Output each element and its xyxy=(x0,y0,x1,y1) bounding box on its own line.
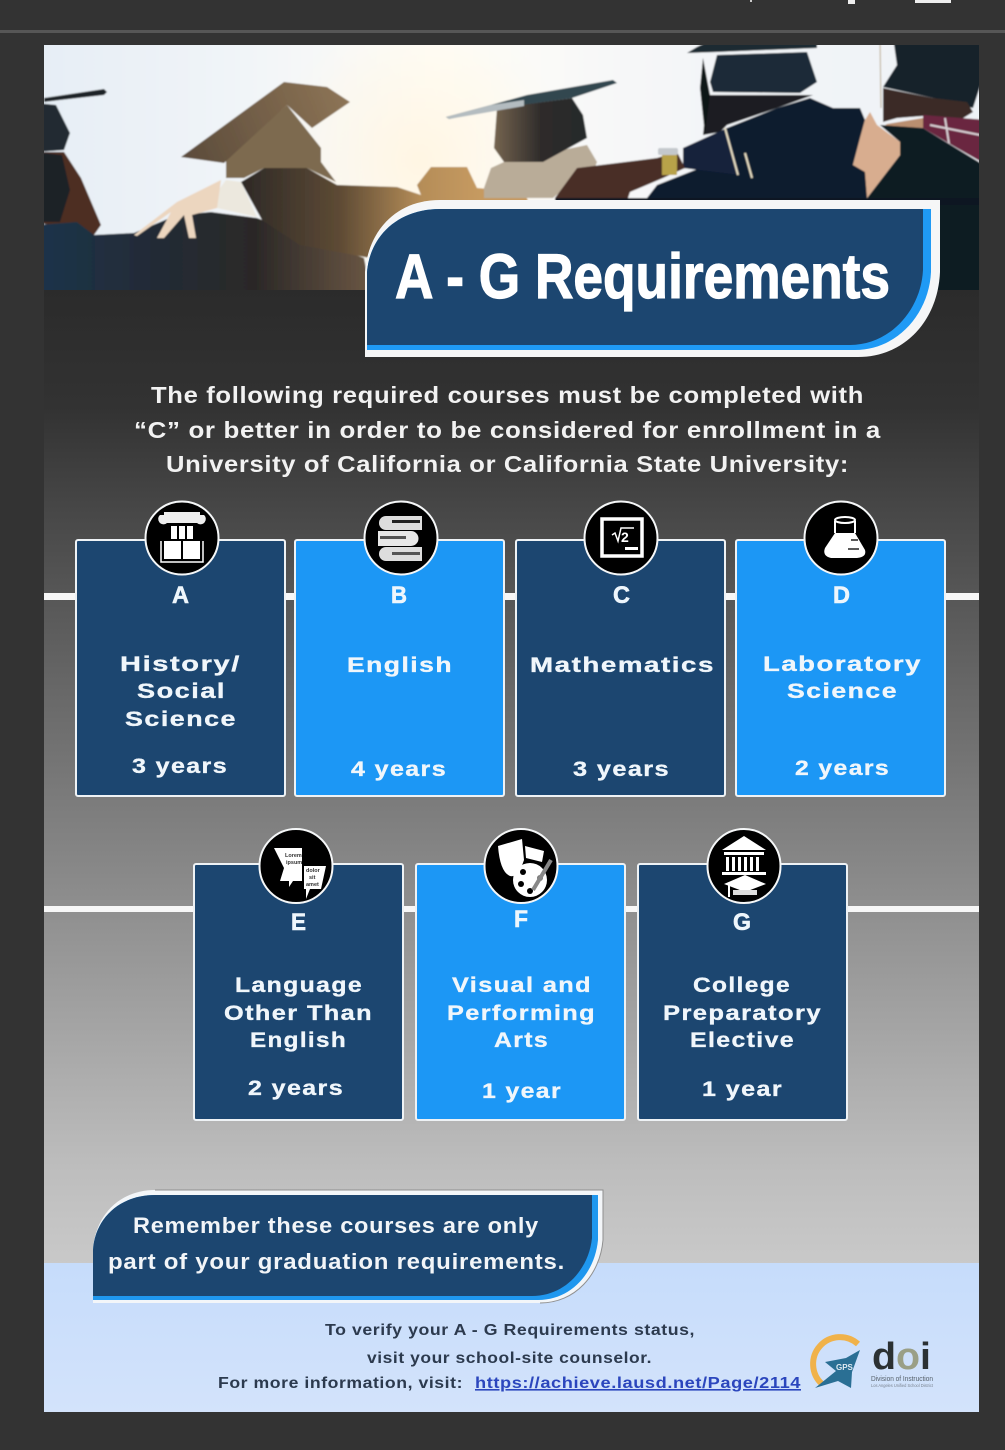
footer text: For more information, visit: xyxy=(218,1375,463,1392)
title banner xyxy=(365,200,940,357)
icon: laboratory flask xyxy=(804,502,878,574)
icon: chalkboard with square root xyxy=(584,502,658,574)
logo: GPS: GPS xyxy=(836,1363,854,1372)
icon: speech bubbles: sit xyxy=(309,875,316,881)
card F: Visual and xyxy=(452,973,592,997)
logo: doi: Division of Instruction xyxy=(871,1376,933,1383)
card A: Social xyxy=(137,679,226,703)
logo: GPS xyxy=(813,1337,860,1388)
card F: Arts xyxy=(494,1028,549,1052)
title: A - G Requirements xyxy=(395,242,890,312)
card C: 3 years xyxy=(573,757,670,781)
card E: Other Than xyxy=(224,1001,373,1025)
card D: 2 years xyxy=(795,756,890,780)
icon: chalkboard with square root: 2 xyxy=(621,529,629,545)
third graduate xyxy=(446,80,617,198)
card G: 1 year xyxy=(702,1077,783,1101)
icon: speech bubbles: dolor xyxy=(306,868,321,874)
fifth graduate xyxy=(852,45,979,290)
logo: doi: Los Angeles Unified School District xyxy=(871,1383,934,1388)
card E: 2 years xyxy=(248,1076,344,1100)
intro text: “C” or better in order to be considered for enrollment in a xyxy=(134,417,881,443)
card E: Language xyxy=(235,973,363,997)
footer text: visit your school-site counselor. xyxy=(367,1350,652,1367)
card E: English xyxy=(250,1028,347,1052)
photo: graduates seen from behind xyxy=(36,37,987,298)
card B: B xyxy=(391,582,407,609)
logo: doi: doi xyxy=(872,1336,931,1378)
card B xyxy=(295,502,504,796)
card D: Laboratory xyxy=(763,652,922,676)
card B: English xyxy=(347,653,453,677)
footer text: https://achieve.lausd.net/Page/2114 xyxy=(475,1375,801,1392)
card F: Performing xyxy=(447,1001,596,1025)
icon: speech bubbles xyxy=(260,829,332,903)
icon: speech bubbles: Lorem xyxy=(285,853,302,859)
callout xyxy=(93,1190,603,1303)
card C: C xyxy=(613,582,630,609)
card G: G xyxy=(733,909,751,936)
icon: speech bubbles: ipsum xyxy=(286,860,302,866)
callout: part of your graduation requirements. xyxy=(108,1249,565,1274)
card A: Science xyxy=(125,707,237,731)
icon: stack of books xyxy=(364,502,438,574)
connector bar row 2 xyxy=(44,906,979,912)
intro text: The following required courses must be completed with xyxy=(151,382,864,408)
card G xyxy=(638,829,847,1120)
card E xyxy=(194,829,403,1120)
icon: speech bubbles: amet xyxy=(306,882,319,888)
icon: column and open book xyxy=(146,502,218,574)
connector bar row 1 xyxy=(44,593,979,600)
card C: Mathematics xyxy=(530,653,715,677)
card E: E xyxy=(291,909,306,936)
footer text: To verify your A - G Requirements status, xyxy=(325,1322,695,1339)
card G: College xyxy=(693,973,791,997)
card A: A xyxy=(172,582,189,609)
icon: university building and cap xyxy=(708,829,780,903)
card A xyxy=(76,502,285,796)
card D: D xyxy=(833,582,850,609)
card C xyxy=(516,502,725,796)
poster background xyxy=(44,290,979,1412)
card F: F xyxy=(514,906,528,933)
second graduate xyxy=(36,82,530,298)
card D xyxy=(736,502,945,796)
card F xyxy=(416,829,625,1120)
intro text xyxy=(134,382,881,477)
card F: 1 year xyxy=(482,1079,562,1103)
fourth graduate xyxy=(555,37,867,198)
icon: theatre masks and palette xyxy=(484,829,558,903)
footer text xyxy=(218,1322,801,1392)
callout: Remember these courses are only xyxy=(133,1213,539,1238)
card D: Science xyxy=(787,679,898,703)
card A: History/ xyxy=(120,652,241,676)
intro text: University of California or California State University: xyxy=(166,451,849,477)
card G: Elective xyxy=(690,1028,795,1052)
card G: Preparatory xyxy=(663,1001,822,1025)
card A: 3 years xyxy=(132,754,228,778)
card B: 4 years xyxy=(351,757,447,781)
left graduate xyxy=(36,89,107,235)
